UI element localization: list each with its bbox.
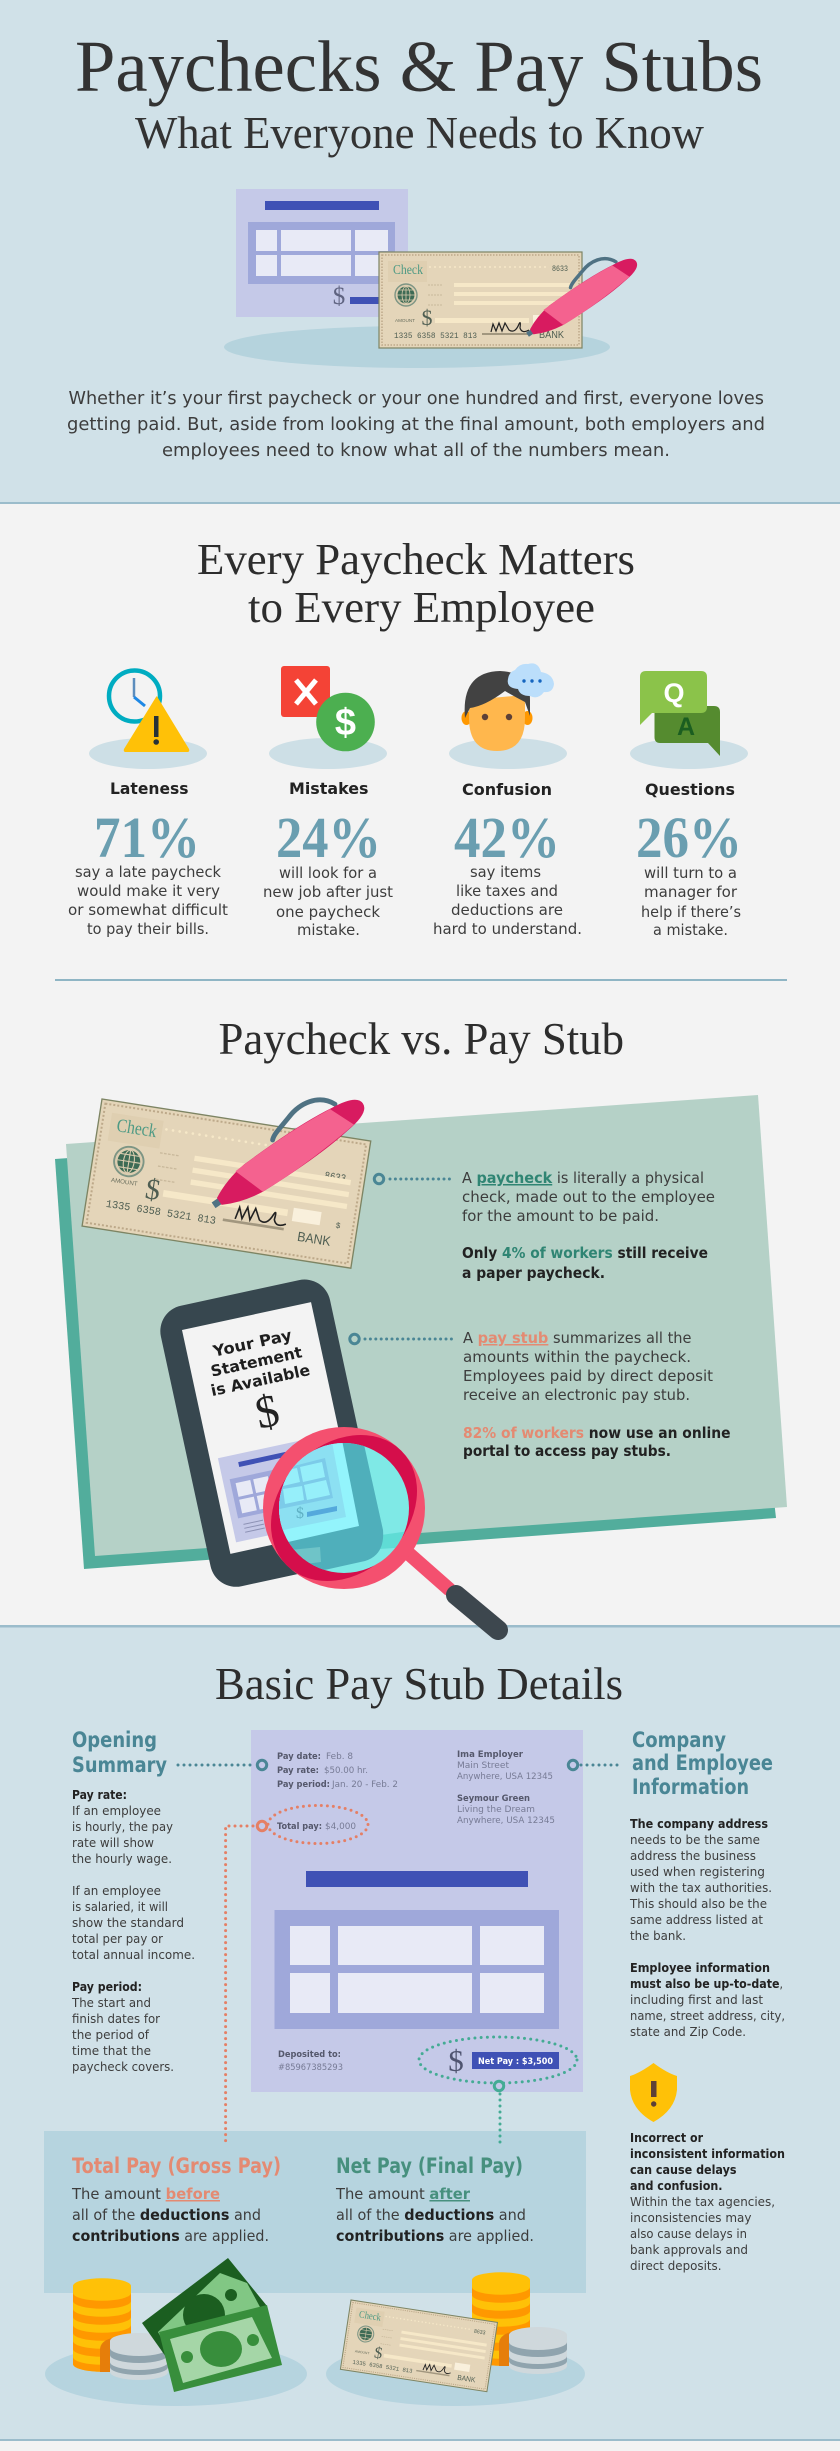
text: opening summary: is hourly, the pay (72, 1819, 174, 1834)
icon: small check: $ (373, 2345, 384, 2363)
column: confusion (433, 663, 582, 938)
intro text: getting paid. But, aside from looking at the final amount, both employers and (67, 415, 765, 435)
text: company and employee information: including first and last (630, 1992, 763, 2007)
description: to pay their bills. (87, 920, 209, 938)
description: say items (470, 863, 541, 881)
connector: company information (568, 1760, 623, 1770)
icon: check: 1335 6358 5321 813 (394, 332, 477, 341)
text: opening summary: If an employee (72, 1803, 161, 1818)
text: paycheck definition (462, 1169, 715, 1282)
icon: small check: BANK (457, 2373, 476, 2384)
description: deductions are (451, 901, 563, 919)
title: Paychecks & Pay Stubs (75, 26, 763, 107)
icon: large check: 1335 6358 5321 813 (105, 1199, 217, 1228)
text: company and employee information: state and Zip Code. (630, 2024, 746, 2039)
icon: question and answer bubbles (630, 671, 748, 769)
icon: question and answer bubbles: Q (663, 678, 685, 708)
text: company and employee information: the bank. (630, 1928, 686, 1943)
connector: total pay (226, 1821, 267, 2145)
phone screen message: is Available (209, 1361, 312, 1400)
icon: check: $ (422, 305, 432, 330)
text: company and employee information: The company address (630, 1816, 768, 1831)
description: mistake. (297, 921, 360, 939)
icon: phone with pay statement (155, 1275, 385, 1592)
icon: large check (82, 1099, 371, 1268)
net pay callout: $ (448, 2043, 464, 2078)
icon: pay stub and check illustration (224, 189, 643, 368)
column: mistakes (263, 666, 393, 939)
phone screen message: Statement (209, 1343, 304, 1381)
text: net pay: The amount after (335, 2185, 471, 2203)
text: pay stub definition: portal to access pay stubs. (463, 1442, 671, 1460)
text: company and employee information: Employee information (630, 1960, 770, 1975)
icon: small check: AMOUNT (355, 2349, 370, 2355)
description: like taxes and (456, 882, 558, 900)
icon: large check: $ (335, 1221, 341, 1231)
panel: basic pay stub details (0, 1625, 840, 2441)
phone screen message (201, 1324, 322, 1447)
text: opening summary: the hourly wage. (72, 1851, 172, 1866)
icon: small check (340, 2300, 497, 2392)
icon: large check: 8633 (324, 1171, 347, 1186)
description: manager for (644, 883, 738, 901)
employer and employee addresses: Living the Dream (457, 1805, 535, 1815)
icon: error and dollar coin: $ (335, 702, 356, 744)
text: opening summary: Pay period: (72, 1979, 142, 1994)
text: pay stub definition: Employees paid by direct deposit (463, 1367, 713, 1385)
text: company and employee information: and Employee (632, 1751, 773, 1775)
icon: clock and warning (89, 670, 207, 769)
icon: large check: Check (115, 1115, 159, 1142)
icon: magnifying glass: $ (296, 1505, 304, 1522)
icon: check (379, 252, 582, 348)
text: company and employee information: used when registering (630, 1864, 765, 1879)
text: opening summary: is salaried, it will (72, 1899, 168, 1914)
icon: coins and check (326, 2272, 585, 2406)
opening summary fields: Pay period: (277, 1780, 330, 1790)
heading: Paycheck vs. Pay Stub (218, 1014, 624, 1064)
deposit details (278, 2050, 343, 2073)
opening summary fields: Jan. 20 - Feb. 2 (331, 1780, 398, 1790)
icon: small check: 1335 6358 5321 813 (352, 2359, 413, 2375)
text: company and employee information: with the tax authorities. (630, 1880, 772, 1895)
icon: pen (514, 242, 643, 345)
icon: warning shield (630, 2063, 677, 2122)
net pay callout: Net Pay : $3,500 (478, 2057, 553, 2067)
total pay callout (268, 1806, 368, 1844)
text: pay stub definition: A pay stub summarizes all the (463, 1329, 692, 1347)
text: warning note: bank approvals and (630, 2242, 748, 2257)
opening summary fields: $50.00 hr. (324, 1766, 368, 1776)
text: company and employee information: address the business (630, 1848, 756, 1863)
text: paycheck definition: for the amount to be paid. (462, 1207, 659, 1225)
text: net pay: Net Pay (Final Pay) (336, 2154, 523, 2178)
subtitle: What Everyone Needs to Know (135, 108, 704, 158)
text: opening summary: time that the (72, 2043, 151, 2058)
phone screen message: Your Pay (210, 1326, 293, 1361)
text: opening summary: total per pay or (72, 1931, 164, 1946)
blue summary box (44, 2131, 586, 2293)
description (68, 863, 228, 938)
text: opening summary: rate will show (72, 1835, 154, 1850)
text: company and employee information: Information (632, 1775, 749, 1799)
statistic: 26% (636, 805, 742, 870)
text: total pay (71, 2154, 281, 2245)
text: warning note: Incorrect or (630, 2130, 704, 2145)
description: new job after just (263, 883, 393, 901)
text: pay stub definition: receive an electronic pay stub. (463, 1386, 690, 1404)
intro text: employees need to know what all of the numbers mean. (162, 441, 670, 461)
deposit details: #85967385293 (278, 2063, 343, 2073)
icon: check: AMOUNT (395, 318, 415, 323)
text: total pay: The amount before (71, 2185, 220, 2203)
text: opening summary: the period of (72, 2027, 150, 2042)
text: net pay: contributions are applied. (336, 2227, 534, 2245)
text: opening summary (71, 1728, 195, 2074)
employer and employee addresses: Main Street (457, 1761, 510, 1771)
connector: net pay (494, 2081, 504, 2148)
icon: small check: Check (358, 2310, 382, 2324)
description (433, 863, 582, 938)
heading: Every Paycheck Matters (197, 535, 635, 584)
panel: introduction (0, 0, 840, 504)
heading: Basic Pay Stub Details (215, 1659, 623, 1709)
text: opening summary: Summary (72, 1753, 167, 1777)
connector: pay stub (350, 1334, 453, 1344)
opening summary fields: Pay rate: (277, 1766, 319, 1776)
connector: opening summary (178, 1760, 267, 1770)
text: warning note (630, 2130, 785, 2273)
heading: to Every Employee (248, 583, 595, 632)
icon: large pen (195, 1076, 373, 1220)
text: total pay: contributions are applied. (72, 2227, 269, 2245)
text: opening summary: If an employee (72, 1883, 161, 1898)
statistic: 24% (276, 805, 381, 870)
text: company and employee information: same address listed at (630, 1912, 763, 1927)
statistic: 71% (94, 805, 200, 870)
text: warning note: direct deposits. (630, 2258, 722, 2273)
connector: paycheck (374, 1174, 453, 1184)
icon: large check: $ (143, 1173, 163, 1207)
intro text (67, 389, 765, 461)
text: warning note: also cause delays in (630, 2226, 747, 2241)
icon: error and dollar coin (269, 666, 387, 769)
text: company and employee information: must also be up-to-date, (630, 1976, 783, 1991)
icon: large check: AMOUNT (110, 1178, 138, 1188)
text: opening summary: show the standard (72, 1915, 184, 1930)
text: total pay: Total Pay (Gross Pay) (72, 2154, 281, 2178)
text: opening summary: finish dates for (72, 2011, 161, 2026)
label: Lateness (110, 779, 188, 798)
background card (55, 1095, 787, 1569)
mini pay stub (218, 1434, 350, 1542)
employer and employee addresses (457, 1750, 555, 1826)
text: total pay: all of the deductions and (72, 2206, 261, 2224)
icon: magnifying glass (241, 1405, 498, 1630)
text: warning note: inconsistent information (630, 2146, 785, 2161)
total pay callout: $4,000 (325, 1822, 356, 1832)
text: company and employee information: This should also be the (629, 1896, 767, 1911)
description: help if there’s (641, 903, 741, 921)
icon: check: 8633 (552, 265, 568, 274)
employer and employee addresses: Anywhere, USA 12345 (457, 1772, 553, 1782)
label: Mistakes (289, 779, 368, 798)
icon: small check: 8633 (473, 2328, 486, 2337)
text: pay stub definition: amounts within the paycheck. (463, 1348, 691, 1366)
text: company and employee information: needs to be the same (630, 1832, 760, 1847)
text: pay stub definition (463, 1329, 730, 1460)
icon: question and answer bubbles: A (677, 713, 695, 741)
description (263, 864, 393, 939)
intro text: Whether it’s your first paycheck or your one hundred and first, everyone loves (68, 389, 764, 409)
text: paycheck definition: A paycheck is literally a physical (462, 1169, 704, 1187)
description: or somewhat difficult (68, 901, 228, 919)
text: opening summary: total annual income. (72, 1947, 195, 1962)
text: paycheck definition: a paper paycheck. (462, 1264, 605, 1282)
text: opening summary: paycheck covers. (72, 2059, 174, 2074)
text: paycheck definition: Only 4% of workers still receive (462, 1244, 708, 1262)
employer and employee addresses: Seymour Green (457, 1794, 530, 1804)
description: say a late paycheck (75, 863, 221, 881)
description (641, 864, 741, 939)
text: paycheck definition: check, made out to the employee (462, 1188, 715, 1206)
net pay callout (419, 2037, 577, 2083)
label: Confusion (462, 780, 552, 799)
icon: pay stub and check illustration: $ (333, 283, 345, 310)
employer and employee addresses: Ima Employer (457, 1750, 524, 1760)
text: warning note: Within the tax agencies, (630, 2194, 775, 2209)
panel: paycheck vs pay stub (55, 1014, 787, 1630)
statistic: 42% (454, 805, 560, 870)
icon: check: Check (393, 263, 423, 278)
description: one paycheck (276, 903, 380, 921)
heading (197, 535, 635, 632)
panel: every paycheck matters (68, 535, 748, 939)
total pay callout: Total pay: (277, 1822, 322, 1832)
text: net pay: all of the deductions and (336, 2206, 526, 2224)
table (274, 1910, 559, 2029)
deposit details: Deposited to: (278, 2050, 341, 2060)
description: a mistake. (653, 921, 728, 939)
text: company and employee information (629, 1728, 785, 2039)
label: Questions (645, 780, 735, 799)
text: opening summary: Opening (72, 1728, 157, 1752)
icon: check: BANK (539, 330, 564, 341)
pay stub document (251, 1730, 583, 2092)
phone screen message: $ (250, 1384, 284, 1439)
text: warning note: inconsistencies may (630, 2210, 752, 2225)
opening summary fields (277, 1752, 398, 1790)
description: will turn to a (644, 864, 737, 882)
icon: large check: BANK (296, 1229, 332, 1249)
text: company and employee information: Company (632, 1728, 726, 1752)
icon: coins and cash (45, 2258, 307, 2406)
description: will look for a (279, 864, 377, 882)
text: opening summary: Pay rate: (72, 1787, 127, 1802)
opening summary fields: Feb. 8 (326, 1752, 353, 1762)
employer and employee addresses: Anywhere, USA 12345 (457, 1816, 555, 1826)
icon: confused person (449, 663, 567, 769)
text: company and employee information: name, street address, city, (630, 2008, 785, 2023)
text: warning note: and confusion. (630, 2178, 722, 2193)
text: opening summary: The start and (71, 1995, 151, 2010)
text: pay stub definition: 82% of workers now use an online (463, 1424, 730, 1442)
description: would make it very (77, 882, 220, 900)
text: warning note: can cause delays (630, 2162, 736, 2177)
column: questions (630, 671, 748, 939)
opening summary fields: Pay date: (277, 1752, 321, 1762)
description: hard to understand. (433, 920, 582, 938)
column: lateness (68, 670, 228, 938)
text: net pay (335, 2154, 534, 2245)
